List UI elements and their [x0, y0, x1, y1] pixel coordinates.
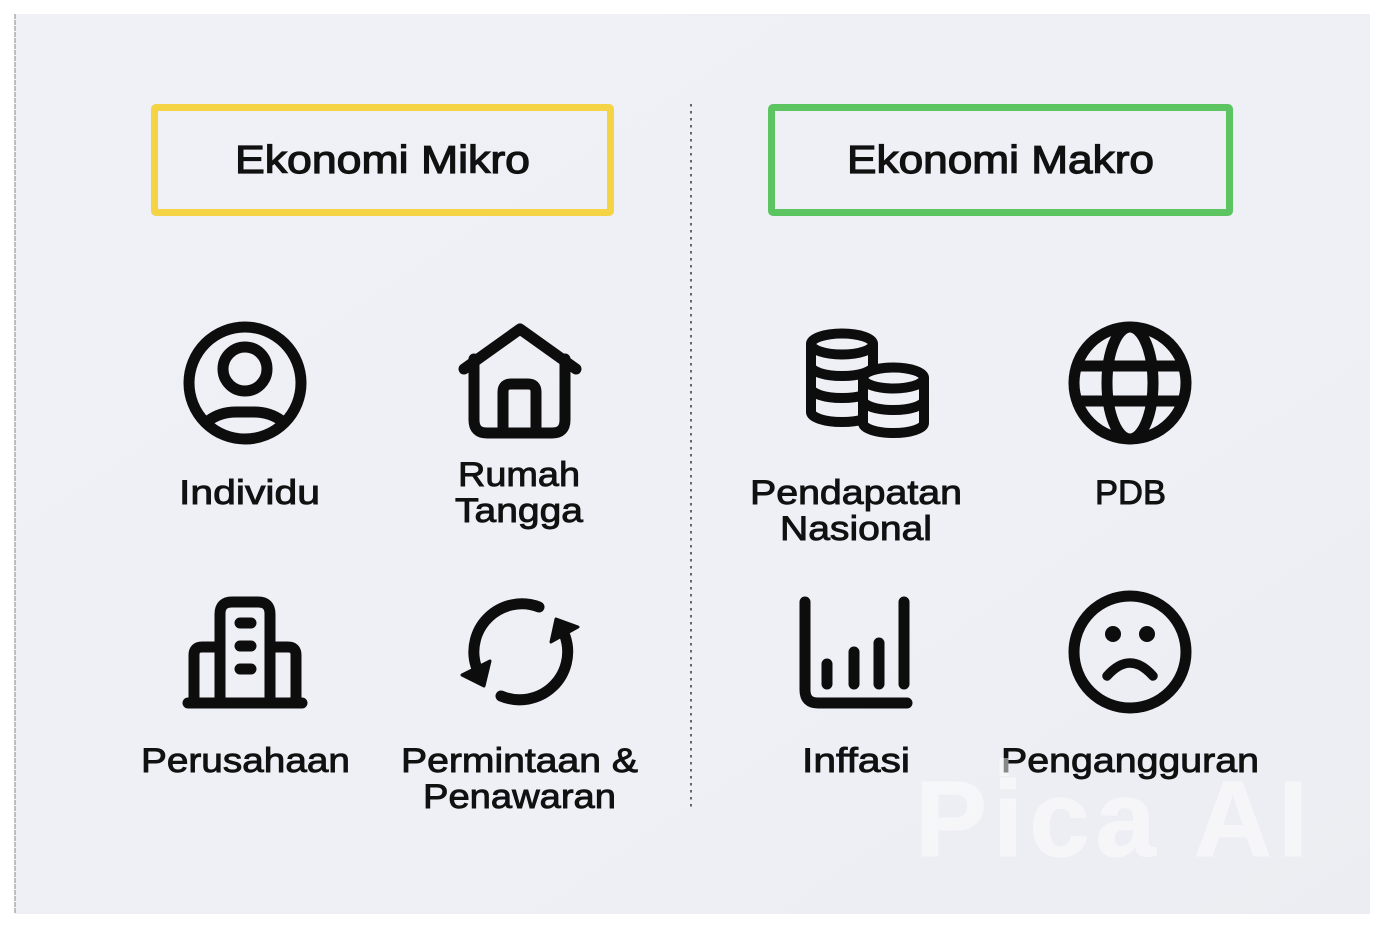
icon: sad face: [1074, 596, 1186, 708]
item: Inflasi: [802, 602, 910, 780]
heading box: Ekonomi Mikro: [154, 108, 610, 212]
item: Perusahaan: [141, 602, 350, 780]
item: Rumah Tangga: Rumah: [458, 456, 580, 494]
panel: Ekonomi Mikro: [141, 108, 638, 816]
icon: person: [189, 327, 301, 439]
heading box: Ekonomi Makro: Ekonomi Makro: [847, 139, 1154, 182]
item: Pengangguran: [1001, 596, 1259, 780]
item: Pengangguran: Pengangguran: [1001, 742, 1259, 780]
item: Perusahaan: Perusahaan: [141, 742, 350, 780]
icon: cycle arrows: [462, 604, 578, 700]
heading box: Ekonomi Mikro: Ekonomi Mikro: [235, 139, 530, 182]
icon: bar chart: [805, 602, 907, 703]
watermark: Pica AI: Pica AI: [915, 758, 1308, 879]
item: Rumah Tangga: [455, 329, 583, 530]
item: PDB: [1074, 327, 1186, 512]
item: Permintaan & Penawaran: [401, 604, 638, 816]
icon: house: [464, 329, 576, 433]
item: Permintaan & Penawaran: Permintaan &: [401, 742, 638, 780]
item: PDB: PDB: [1095, 474, 1166, 512]
item: Pendapatan Nasional: Pendapatan: [750, 474, 962, 512]
item: Pendapatan Nasional: [750, 334, 962, 548]
icon: coin stacks: [811, 334, 924, 433]
panel: Ekonomi Makro: [750, 108, 1259, 780]
item: Permintaan & Penawaran: Penawaran: [423, 778, 616, 816]
item: Rumah Tangga: Tangga: [455, 492, 583, 530]
item: Pendapatan Nasional: Nasional: [780, 510, 932, 548]
icon: office building: [188, 602, 302, 703]
item: Inflasi: Inffasi: [802, 742, 910, 780]
icon: globe: [1074, 327, 1186, 439]
item: Individu: [179, 327, 320, 512]
item: Individu: Individu: [179, 474, 320, 512]
heading box: Ekonomi Makro: [772, 108, 1230, 212]
